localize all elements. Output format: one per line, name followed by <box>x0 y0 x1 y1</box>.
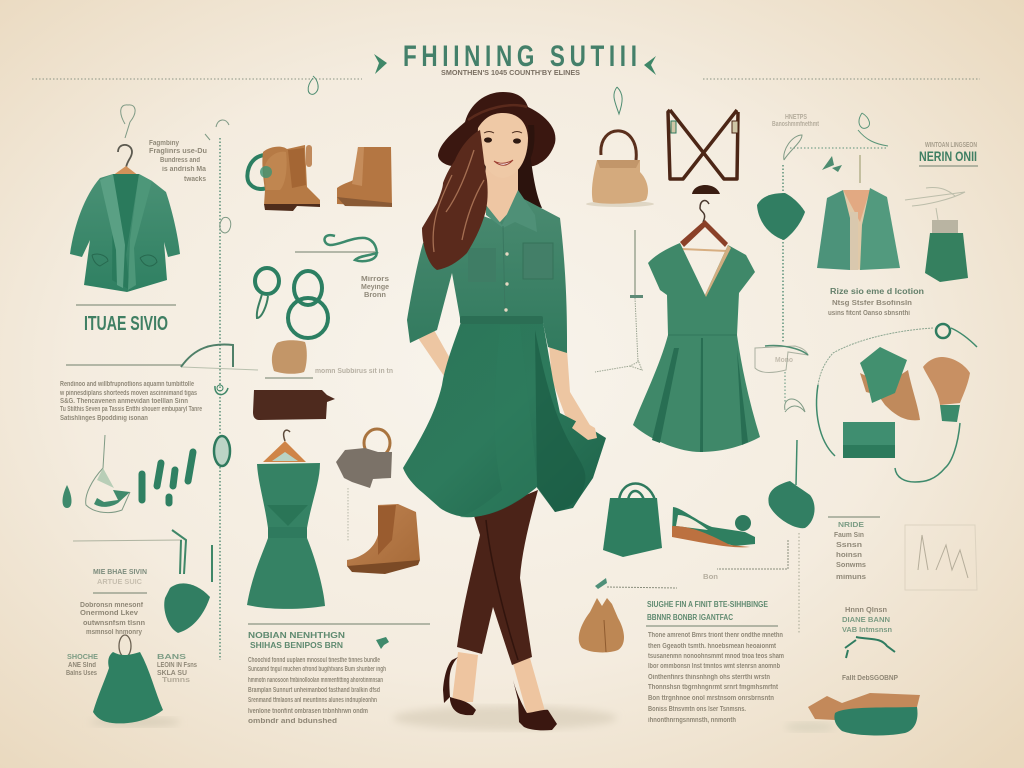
cardigan left panel <box>817 190 851 270</box>
text block: bottom center right: Thonnshsn tbgrnhngnrmt srnrt fmgmhsmrfnt <box>648 684 779 691</box>
icon: tan pouch <box>272 340 307 374</box>
text block: bottom left: SHIHAS BENIPOS BRN <box>250 641 343 650</box>
text and arrow: right bottom: Hnnn Qlnsn <box>845 607 887 614</box>
icon: top ring <box>936 324 950 338</box>
text: center right small <box>755 345 808 372</box>
cardigan lining <box>840 190 870 270</box>
icon: drop left <box>62 485 72 508</box>
panel: sleeveless green dress <box>247 430 325 609</box>
icon: green clutch <box>843 422 895 458</box>
text: dress label <box>73 530 212 636</box>
icon: green tote bag <box>603 484 662 557</box>
icon: green pouch with flap <box>925 220 968 282</box>
text block: left body: Satishlinges Bpoddinig isonan <box>60 415 148 422</box>
text block: bottom center right: SIUGHE FIN A FINIT BTE-SIHHBINGE <box>647 600 769 609</box>
text block: bottom center right: ihnonthnrngsnmnsth, nnmonth <box>648 717 736 724</box>
icon: feather sketch <box>858 113 888 146</box>
text block: bottom center right: Thone amrenot Bmrs triont thenr ondthe mnethn <box>648 632 783 639</box>
right vertical dotted line: Banoshmmfnethmt <box>772 121 819 128</box>
icon: eight shape <box>288 271 328 338</box>
icon: left leaf <box>374 54 387 74</box>
dress shape <box>247 463 325 609</box>
waist band <box>460 316 543 324</box>
handle <box>119 635 131 657</box>
left vertical dotted line <box>205 120 231 660</box>
icon: woven tan handbag <box>586 131 654 207</box>
right vertical dotted line: HNETPS <box>785 114 807 121</box>
icon: green scarf <box>860 347 907 403</box>
text block: bottom left: Bramplan Sunnurt unheimanbod fasthand bralkin dfsd <box>248 687 380 694</box>
right vertical dotted line: Bon <box>703 574 718 581</box>
small note: Bronn <box>364 292 386 299</box>
icon: hanger <box>700 201 709 222</box>
text: blazer note: is andrish Ma <box>162 166 206 173</box>
text block: bottom left: Choochid fonnd uuplaen mnosoul tinesthe tinnes bundle <box>248 657 380 664</box>
text and arrow: right bottom <box>842 607 898 682</box>
text: right small note: NRIDE <box>838 522 864 529</box>
text: side notes: Tumns <box>162 677 190 684</box>
panel: green blazer <box>70 105 180 292</box>
dress shape <box>633 243 760 452</box>
shirt <box>407 198 567 353</box>
icon: floral sketch <box>121 105 135 138</box>
eyes and mouth <box>484 137 492 143</box>
icon: safety pin <box>295 235 378 261</box>
skirt <box>403 322 606 517</box>
icon: right leaf <box>644 56 656 75</box>
text block: bottom center right <box>646 600 784 724</box>
hat whole <box>438 92 555 166</box>
diagram: ring arc with items <box>817 324 977 482</box>
icon: green dashes <box>142 452 193 503</box>
text block: bottom left: ombndr and bdunshed <box>248 718 337 725</box>
icon: leaves <box>822 156 842 172</box>
text block: bottom center right: BBNNR BONBR IGANTFAC <box>647 613 733 622</box>
subtitle: SMONTHEN'S 1045 COUNTH'BY ELINES <box>441 68 580 77</box>
text: center right small: Mono <box>775 357 793 364</box>
icon: hanger <box>284 430 290 441</box>
header rules <box>32 76 980 94</box>
text and arrow: right bottom: VAB Intmsnsn <box>842 627 892 634</box>
icon: thin hook <box>595 230 643 372</box>
shirt details <box>486 190 537 232</box>
arc <box>818 328 933 385</box>
hair right strand <box>526 125 535 165</box>
text: side notes <box>66 654 197 684</box>
right vertical dotted line <box>703 114 888 633</box>
text: right note: usins fitcnt Oanso sbnsnthi <box>828 310 910 317</box>
text: side notes: BANS <box>157 654 186 661</box>
icon: short brown boot <box>337 147 392 207</box>
icon: green flat shoes <box>672 507 755 547</box>
icon: hanger <box>118 145 132 168</box>
hand <box>572 418 597 440</box>
text and arrow: right bottom: Fallt DebSGOBNP <box>842 675 898 682</box>
arrow <box>845 637 895 658</box>
panel: green V-neck dress <box>633 201 760 452</box>
cardigan right panel <box>860 188 900 270</box>
panel: green cape coat <box>90 635 180 727</box>
text block: bottom center right: Boniss Btnsvmtn ons Iser Tsnmsns. <box>648 706 746 713</box>
icon: crossed straps <box>668 110 738 179</box>
icon: nine shape <box>255 268 279 318</box>
text block: bottom left: Suncamd tngul muchen ofrond bugihtvans Bum shunber ingh <box>248 666 386 673</box>
text block: left body: S&G. Thencavenen anmevidan toelllan Sinn <box>60 398 188 405</box>
hair back <box>482 140 542 208</box>
icon: green sack <box>757 193 805 240</box>
small note: Meyinge <box>361 284 389 291</box>
right arm <box>549 345 594 438</box>
text: right small note: Faum Sin <box>834 532 864 539</box>
title block <box>374 39 656 77</box>
text: dress label: ARTUE SUIC <box>97 579 142 586</box>
icon: dark brown wallet <box>253 368 393 420</box>
face <box>478 113 528 178</box>
text: blazer note: twacks <box>184 176 206 183</box>
text block: bottom center right: Bon ttrgnhnoe onol mrstnsom onrsbrnsntn <box>648 695 774 702</box>
figure: woman <box>393 92 617 730</box>
text: right small note: mimuns <box>836 574 866 581</box>
icon: green squiggle <box>172 530 212 582</box>
icon: tan drawstring bag <box>579 578 677 652</box>
neck <box>482 165 518 225</box>
sketch: city outline <box>905 525 977 590</box>
hair left flow <box>422 130 488 270</box>
icon: small dark cap <box>692 185 720 194</box>
heading: top right: NERIN ONII <box>919 148 977 164</box>
text block: bottom left: NOBIAN NENHTHGN <box>248 631 345 640</box>
text: right small note <box>828 517 880 581</box>
icon: handwritten sketch <box>905 187 965 220</box>
icon: green slippers <box>785 693 920 735</box>
text: dress label: Dobronsn mnesonf <box>80 602 144 609</box>
text: right note <box>828 287 924 317</box>
icon: gray handbag with brown ring <box>336 429 392 542</box>
text block: bottom left: Srenmand tfmlaons anl meuntinns alunes indnupleonhn <box>248 697 377 704</box>
text block: bottom center right: Ointhenfinrs thinsnhngh ohs sterrthi wrstn <box>648 674 770 681</box>
heading: top right: WINTOAN LINGSEON <box>925 142 977 149</box>
text: blazer note: Bundress and <box>160 157 200 164</box>
icon: tan scarf <box>860 370 920 420</box>
text block: left body: Tu Stilthis Seven pa Tassis Entthi shouerr embuparyl Tanre <box>60 406 202 413</box>
small note <box>361 276 389 299</box>
text block: left body <box>59 381 202 422</box>
text: side notes: LEOIN IN Fsns <box>157 662 197 669</box>
icon: dark brown wallet: momn Subbirus sit in tn <box>315 368 393 375</box>
heading: top right <box>919 142 978 166</box>
text: dress label: MIE BHAE SIVIN <box>93 569 147 576</box>
text block: bottom left: hmmotn nanosoon fmbinolloolan mnmenfitting ahorotinmnsan <box>248 677 383 684</box>
coat body <box>93 652 163 723</box>
panel: sketch bell and drops <box>62 435 193 513</box>
text: dress label: msmnsol hnmonry <box>86 629 142 636</box>
text: right small note: Sonwms <box>836 562 866 569</box>
text: right small note: hoinsn <box>836 552 862 559</box>
small note: Mirrors <box>361 276 389 283</box>
icon: ankle boot <box>347 504 420 574</box>
icon: green ring <box>247 155 268 189</box>
left arm <box>418 330 468 382</box>
text block: bottom center right: Ibor ommbonsn Inst tmntos wmt stenrsn anomnb <box>648 663 780 670</box>
text block: bottom center right: tsusanenmn nonoohnsmmt mnod tnoa teos sham <box>648 653 784 660</box>
text: side notes: ANE Slnd <box>68 662 96 669</box>
icon: green leaf bag <box>164 583 210 633</box>
icon: small leaf mark <box>376 637 389 649</box>
icon: botanical sketch <box>614 87 622 114</box>
text: right note: Rize sio eme d Icotion <box>830 287 924 296</box>
text: right note: Ntsg Stsfer Bsofinsln <box>832 300 912 307</box>
text: right small note: Ssnsn <box>836 542 862 549</box>
text: blazer note: Fraglinrs use-Du <box>149 148 207 155</box>
jacket body <box>70 174 180 292</box>
icon: tall brown boot <box>260 145 320 211</box>
icon: tan wrap <box>923 357 970 405</box>
text: side notes: SKLA SU <box>157 670 187 677</box>
text: side notes: BaIns Uses <box>66 670 97 677</box>
text block: bottom center right: then Ggeaoth tsmth. hnoebsmean heoaionmt <box>648 643 777 650</box>
text: blazer note <box>149 140 207 183</box>
shoes <box>443 657 476 715</box>
text block: bottom left: lvenlone tnonfint ombrasen tnbnhhrwn ondm <box>248 708 368 715</box>
text: blazer note: Fagmbiny <box>149 140 179 147</box>
text: dress label: outwnsnfsm tlsnn <box>83 620 145 627</box>
text block: left body: Rendinoo and willbfrupnotlions aquamn tumbittolle <box>60 381 194 388</box>
label: blazer <box>76 305 176 335</box>
text block: left body: w pinnesdiplans shorteeds moven ascinnimand tigas <box>59 390 197 397</box>
text and arrow: right bottom: DIANE BANN <box>842 617 890 624</box>
panel: open cardigan <box>817 155 900 270</box>
pants <box>457 490 538 665</box>
text: dress label: Onermond Lkev <box>80 610 138 617</box>
label: blazer: ITUAE SIVIO <box>84 313 168 335</box>
text: side notes: SHOCHE <box>67 654 98 661</box>
legs skin <box>452 652 545 714</box>
icon: hook knot <box>215 385 228 395</box>
icon: drop pendant <box>214 436 230 466</box>
text block: bottom left <box>248 624 430 725</box>
floor shadow <box>393 706 617 730</box>
icon: green guitar shape <box>768 440 815 528</box>
title: FHIINING SUTIII <box>403 39 637 73</box>
line and arch <box>66 345 258 370</box>
